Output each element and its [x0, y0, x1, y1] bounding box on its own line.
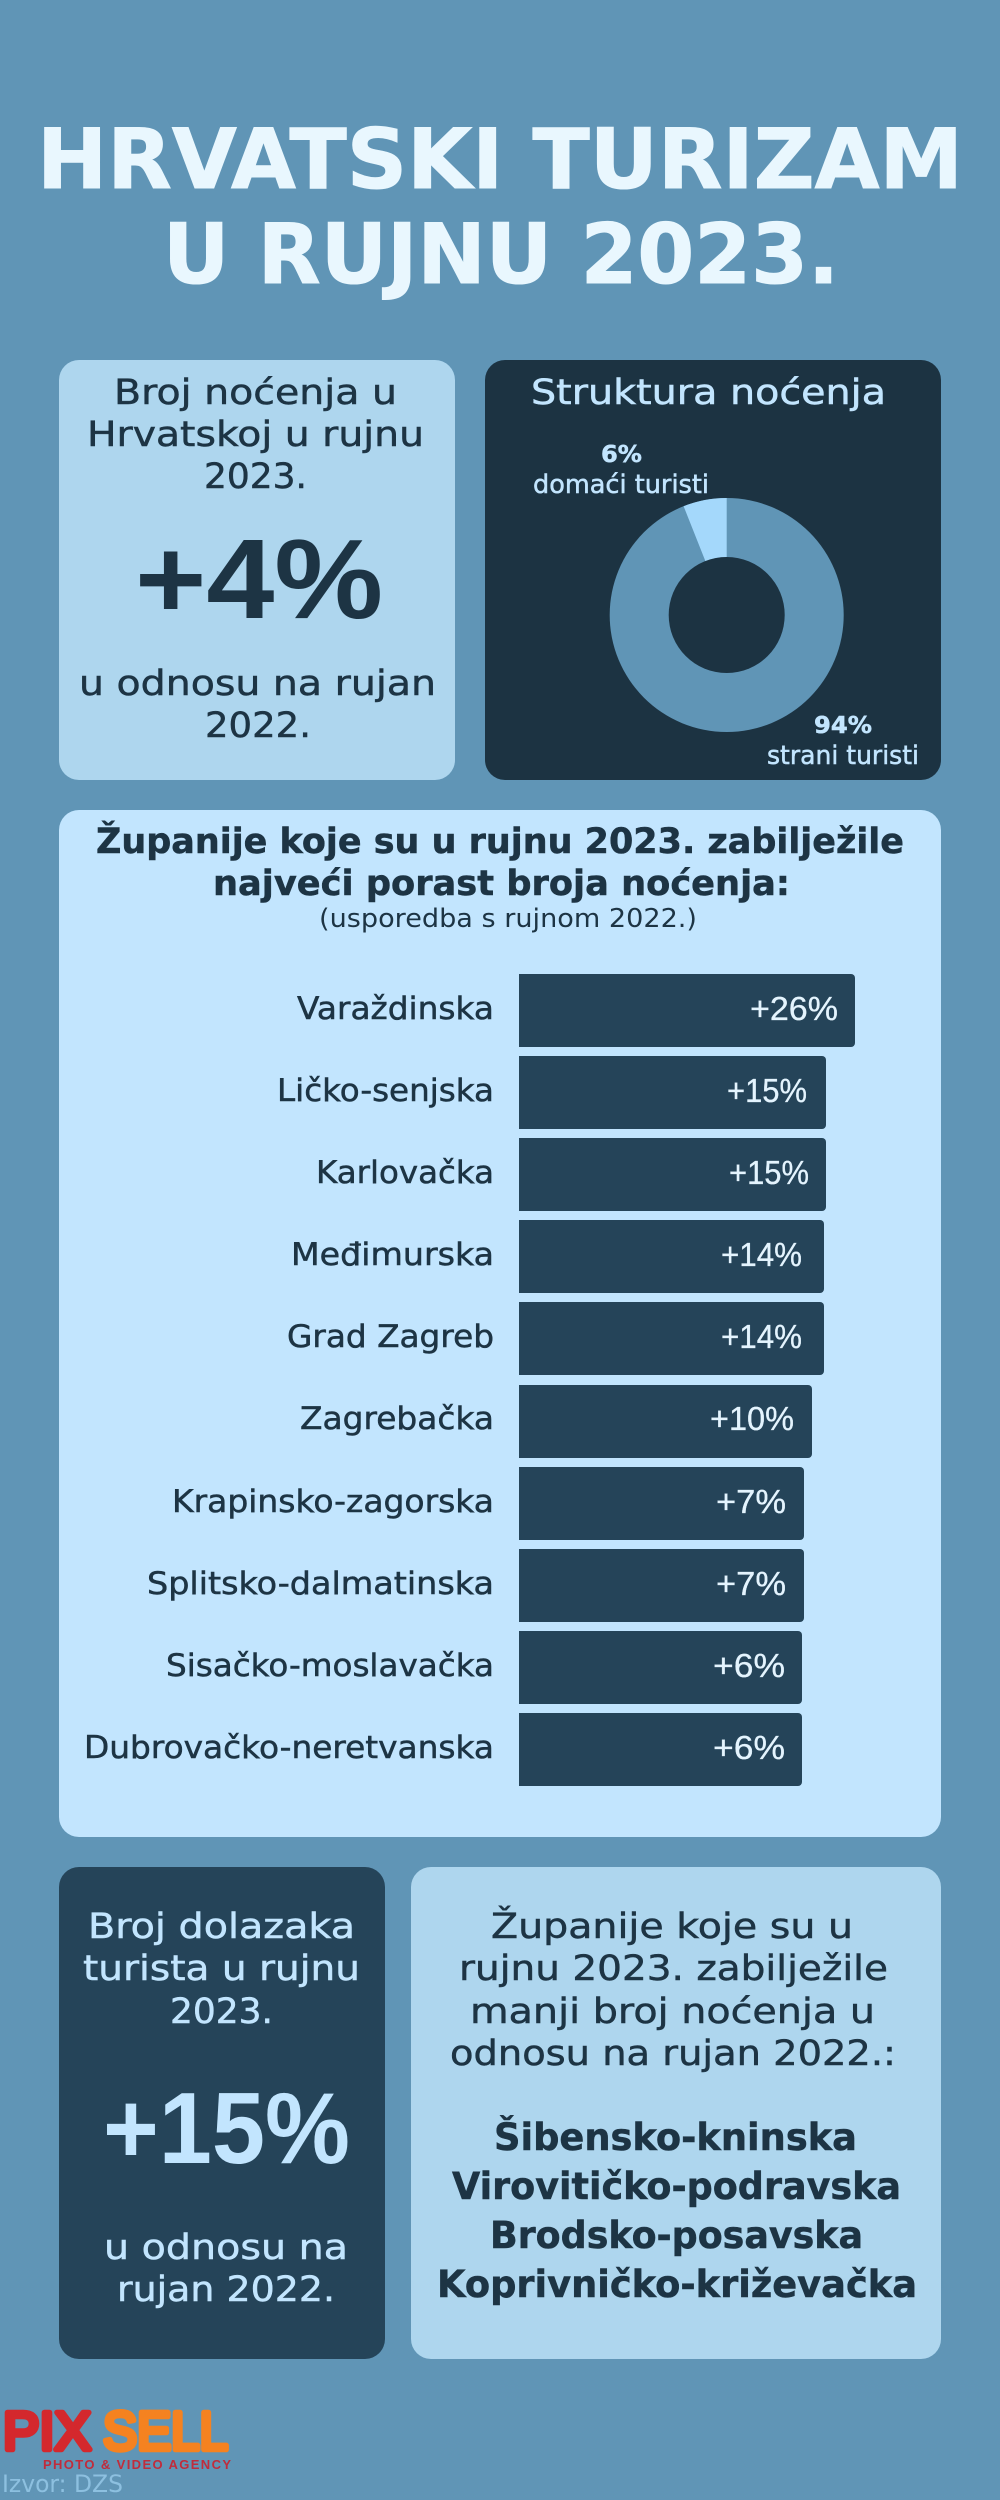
bar: Krapinsko-zagorska	[172, 1467, 804, 1540]
bar: Grad Zagreb	[287, 1302, 824, 1375]
big number: +15%: +15%	[103, 2073, 350, 2185]
logo: Pixsell: SELL	[103, 2402, 228, 2462]
title: HRVATSKI TURIZAM	[37, 111, 963, 208]
bar: Dubrovačko-neretvanska: +6%	[713, 1729, 785, 1766]
heading: fewer overnight stays: odnosu na rujan 2022.:	[450, 2034, 896, 2074]
bar: Dubrovačko-neretvanska: Dubrovačko-neretvanska	[84, 1730, 494, 1766]
panel: tourist arrivals	[59, 1867, 385, 2359]
bar: Grad Zagreb: +14%	[721, 1318, 802, 1355]
logo: Pixsell	[3, 2402, 231, 2472]
bar: Međimurska: +14%	[721, 1236, 802, 1273]
label: domestic tourists: 6%	[601, 442, 642, 468]
title	[37, 111, 963, 303]
bar: Ličko-senjska: Ličko-senjska	[277, 1073, 494, 1109]
label: domestic tourists	[533, 442, 709, 500]
bar: Međimurska: Međimurska	[291, 1237, 494, 1273]
bar: Ličko-senjska	[277, 1056, 826, 1129]
comparison note	[79, 664, 436, 746]
label: domestic tourists: domaći turisti	[533, 470, 709, 500]
heading: arrivals: turista u rujnu	[83, 1949, 360, 1989]
heading: fewer overnight stays	[450, 1905, 896, 2074]
heading: arrivals: Broj dolazaka	[88, 1907, 355, 1947]
bar: Krapinsko-zagorska: Krapinsko-zagorska	[172, 1484, 494, 1520]
heading: overnight stays	[87, 373, 424, 497]
county list: Brodsko-posavska	[490, 2214, 863, 2257]
comparison note: u odnosu na	[104, 2228, 348, 2268]
panel: counties with fewer overnight stays	[411, 1867, 941, 2359]
bar chart	[84, 974, 855, 1786]
bar: Zagrebačka: Zagrebačka	[300, 1401, 494, 1437]
subheading: comparison: (usporedba s rujnom 2022.)	[319, 904, 697, 934]
heading: structure: Struktura noćenja	[531, 373, 886, 413]
panel: counties with largest growth	[59, 810, 941, 1837]
label: foreign tourists: 94%	[814, 713, 872, 739]
comparison note: 2022.	[205, 706, 311, 746]
bar: Sisačko-moslavačka: +6%	[713, 1647, 785, 1684]
label: foreign tourists	[767, 713, 919, 771]
bar: Splitsko-dalmatinska	[147, 1549, 804, 1622]
bar: Karlovačka: +15%	[729, 1154, 809, 1191]
bar: Krapinsko-zagorska: +7%	[716, 1483, 786, 1520]
county list: Koprivničko-križevačka	[437, 2263, 917, 2306]
logo: Pixsell: PIX	[3, 2402, 91, 2462]
bar: Sisačko-moslavačka	[166, 1631, 802, 1704]
big number: +4%: +4%	[135, 516, 383, 642]
bar: Splitsko-dalmatinska: Splitsko-dalmatinska	[147, 1566, 494, 1602]
county list: Virovitičko-podravska	[452, 2165, 901, 2208]
label: foreign tourists: strani turisti	[767, 741, 919, 771]
bar: Zagrebačka: +10%	[710, 1400, 794, 1437]
bar: Sisačko-moslavačka: Sisačko-moslavačka	[166, 1648, 494, 1684]
bar: Ličko-senjska: +15%	[727, 1072, 807, 1109]
bar: Zagrebačka	[300, 1385, 812, 1458]
bar: Splitsko-dalmatinska: +7%	[716, 1565, 786, 1602]
title: U RUJNU 2023.	[163, 206, 839, 303]
heading: arrivals	[83, 1907, 360, 2032]
heading: overnight stays: Broj noćenja u	[114, 373, 397, 413]
heading: overnight stays: 2023.	[204, 457, 307, 497]
heading: arrivals: 2023.	[170, 1992, 273, 2032]
county list: Šibensko-kninska	[494, 2115, 857, 2159]
panel: structure of overnight stays	[485, 360, 941, 780]
heading: fewer overnight stays: Županije koje su u	[491, 1905, 853, 1947]
comparison note: u odnosu na rujan	[79, 664, 436, 704]
bar: Dubrovačko-neretvanska	[84, 1713, 802, 1786]
bar: Varaždinska: +26%	[750, 990, 838, 1027]
panel: overnight stays change	[59, 360, 455, 780]
comparison note	[104, 2228, 348, 2310]
source: Izvor: DZS	[2, 2470, 123, 2498]
comparison note: rujan 2022.	[117, 2270, 335, 2310]
heading: largest growth: najveći porast broja noćenja:	[213, 864, 790, 904]
logo: Pixsell: PHOTO & VIDEO AGENCY	[43, 2457, 231, 2472]
donut chart	[610, 498, 844, 732]
bar: Međimurska	[291, 1220, 824, 1293]
bar: Varaždinska: Varaždinska	[297, 991, 494, 1027]
bar: Varaždinska	[297, 974, 855, 1047]
heading: largest growth	[96, 820, 904, 904]
heading: fewer overnight stays: rujnu 2023. zabilježile	[459, 1949, 888, 1989]
heading: overnight stays: Hrvatskoj u rujnu	[87, 415, 424, 455]
heading: fewer overnight stays: manji broj noćenja u	[470, 1992, 875, 2032]
bar: Karlovačka: Karlovačka	[316, 1155, 494, 1191]
bar: Grad Zagreb: Grad Zagreb	[287, 1319, 494, 1355]
county list	[437, 2115, 917, 2306]
heading: largest growth: Županije koje su u rujnu 2023. zabilježile	[96, 820, 904, 862]
bar: Karlovačka	[316, 1138, 826, 1211]
